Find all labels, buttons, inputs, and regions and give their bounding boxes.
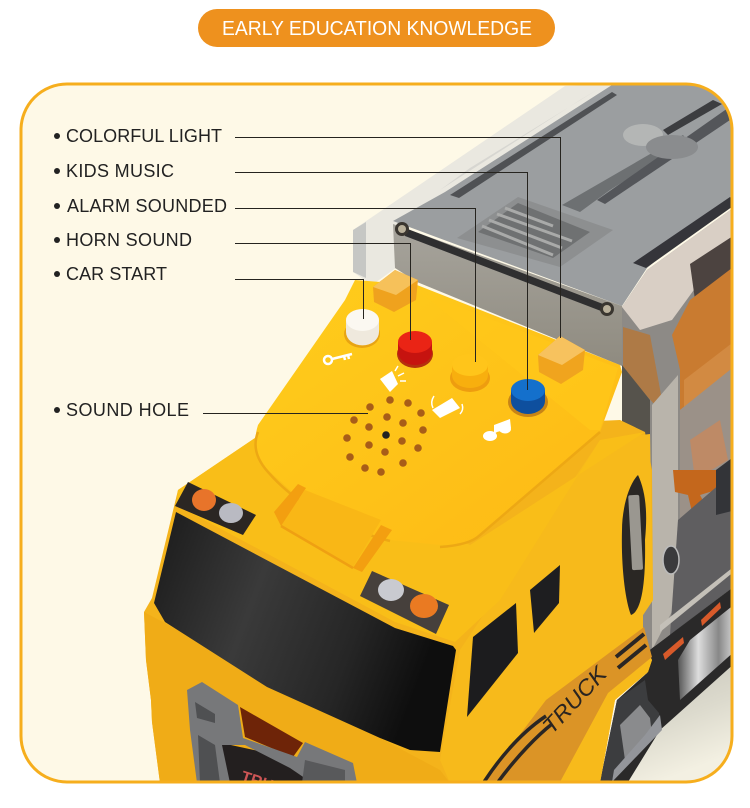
front grille xyxy=(187,682,356,780)
control panel xyxy=(256,280,622,547)
headlight sticker left xyxy=(175,482,256,535)
label: sound hole: SOUND HOLE xyxy=(66,400,189,420)
clear pillar xyxy=(652,375,678,650)
button: blue xyxy=(508,379,548,417)
toy orange xyxy=(672,269,730,410)
label: horn sound: HORN SOUND xyxy=(66,230,192,250)
leader lines xyxy=(203,138,560,414)
cargo top grooves xyxy=(450,92,736,268)
dark gap xyxy=(622,365,650,434)
hinge clip xyxy=(274,484,392,572)
brown panel left xyxy=(623,327,662,405)
case top clear pieces xyxy=(622,206,736,330)
label: colorful light: COLORFUL LIGHT xyxy=(66,126,222,146)
chassis shadow xyxy=(629,667,730,780)
chassis (black) xyxy=(600,585,736,782)
toy lower xyxy=(673,470,716,509)
icon: light xyxy=(380,366,406,392)
hood above windshield xyxy=(176,432,645,642)
cargo front face xyxy=(393,224,622,366)
side vent xyxy=(622,475,646,615)
side step (gray) xyxy=(600,680,662,782)
clear side case with toy cars xyxy=(622,206,736,652)
red side lights xyxy=(663,602,721,660)
headlight sticker right xyxy=(360,571,449,634)
label: car start: CAR START xyxy=(66,264,167,284)
cab front lower shade xyxy=(144,612,160,780)
button: white xyxy=(344,309,380,348)
front grille: TRU xyxy=(239,769,275,795)
black slot xyxy=(405,228,603,311)
title pill: EARLY EDUCATION KNOWLEDGE xyxy=(222,17,532,40)
speckled gray xyxy=(680,370,730,518)
label: kids music: KIDS MUSIC xyxy=(66,161,174,181)
cab right side panel xyxy=(600,434,653,780)
screws xyxy=(395,222,614,316)
orange stripe with truck logo: TRUCK xyxy=(537,660,613,738)
windshield xyxy=(154,512,456,752)
grille vent on cargo top xyxy=(457,197,613,267)
button: red xyxy=(397,331,433,368)
icon: music note xyxy=(483,419,511,441)
speaker holes xyxy=(343,396,427,476)
truck photo xyxy=(144,84,736,795)
label: alarm sounded: ALARM SOUNDED xyxy=(67,196,227,216)
chrome tank xyxy=(678,608,730,700)
cargo top (gray) xyxy=(393,85,736,306)
amber light right xyxy=(538,336,585,384)
icon: alarm xyxy=(432,396,463,418)
side windows xyxy=(467,603,518,717)
icon: key xyxy=(324,354,352,364)
cab body xyxy=(144,420,653,783)
amber light left xyxy=(373,270,418,312)
button: yellow xyxy=(450,354,490,392)
title pill xyxy=(198,9,555,47)
orange stripe with truck logo xyxy=(484,627,652,782)
clear shell of cargo box xyxy=(353,84,620,285)
